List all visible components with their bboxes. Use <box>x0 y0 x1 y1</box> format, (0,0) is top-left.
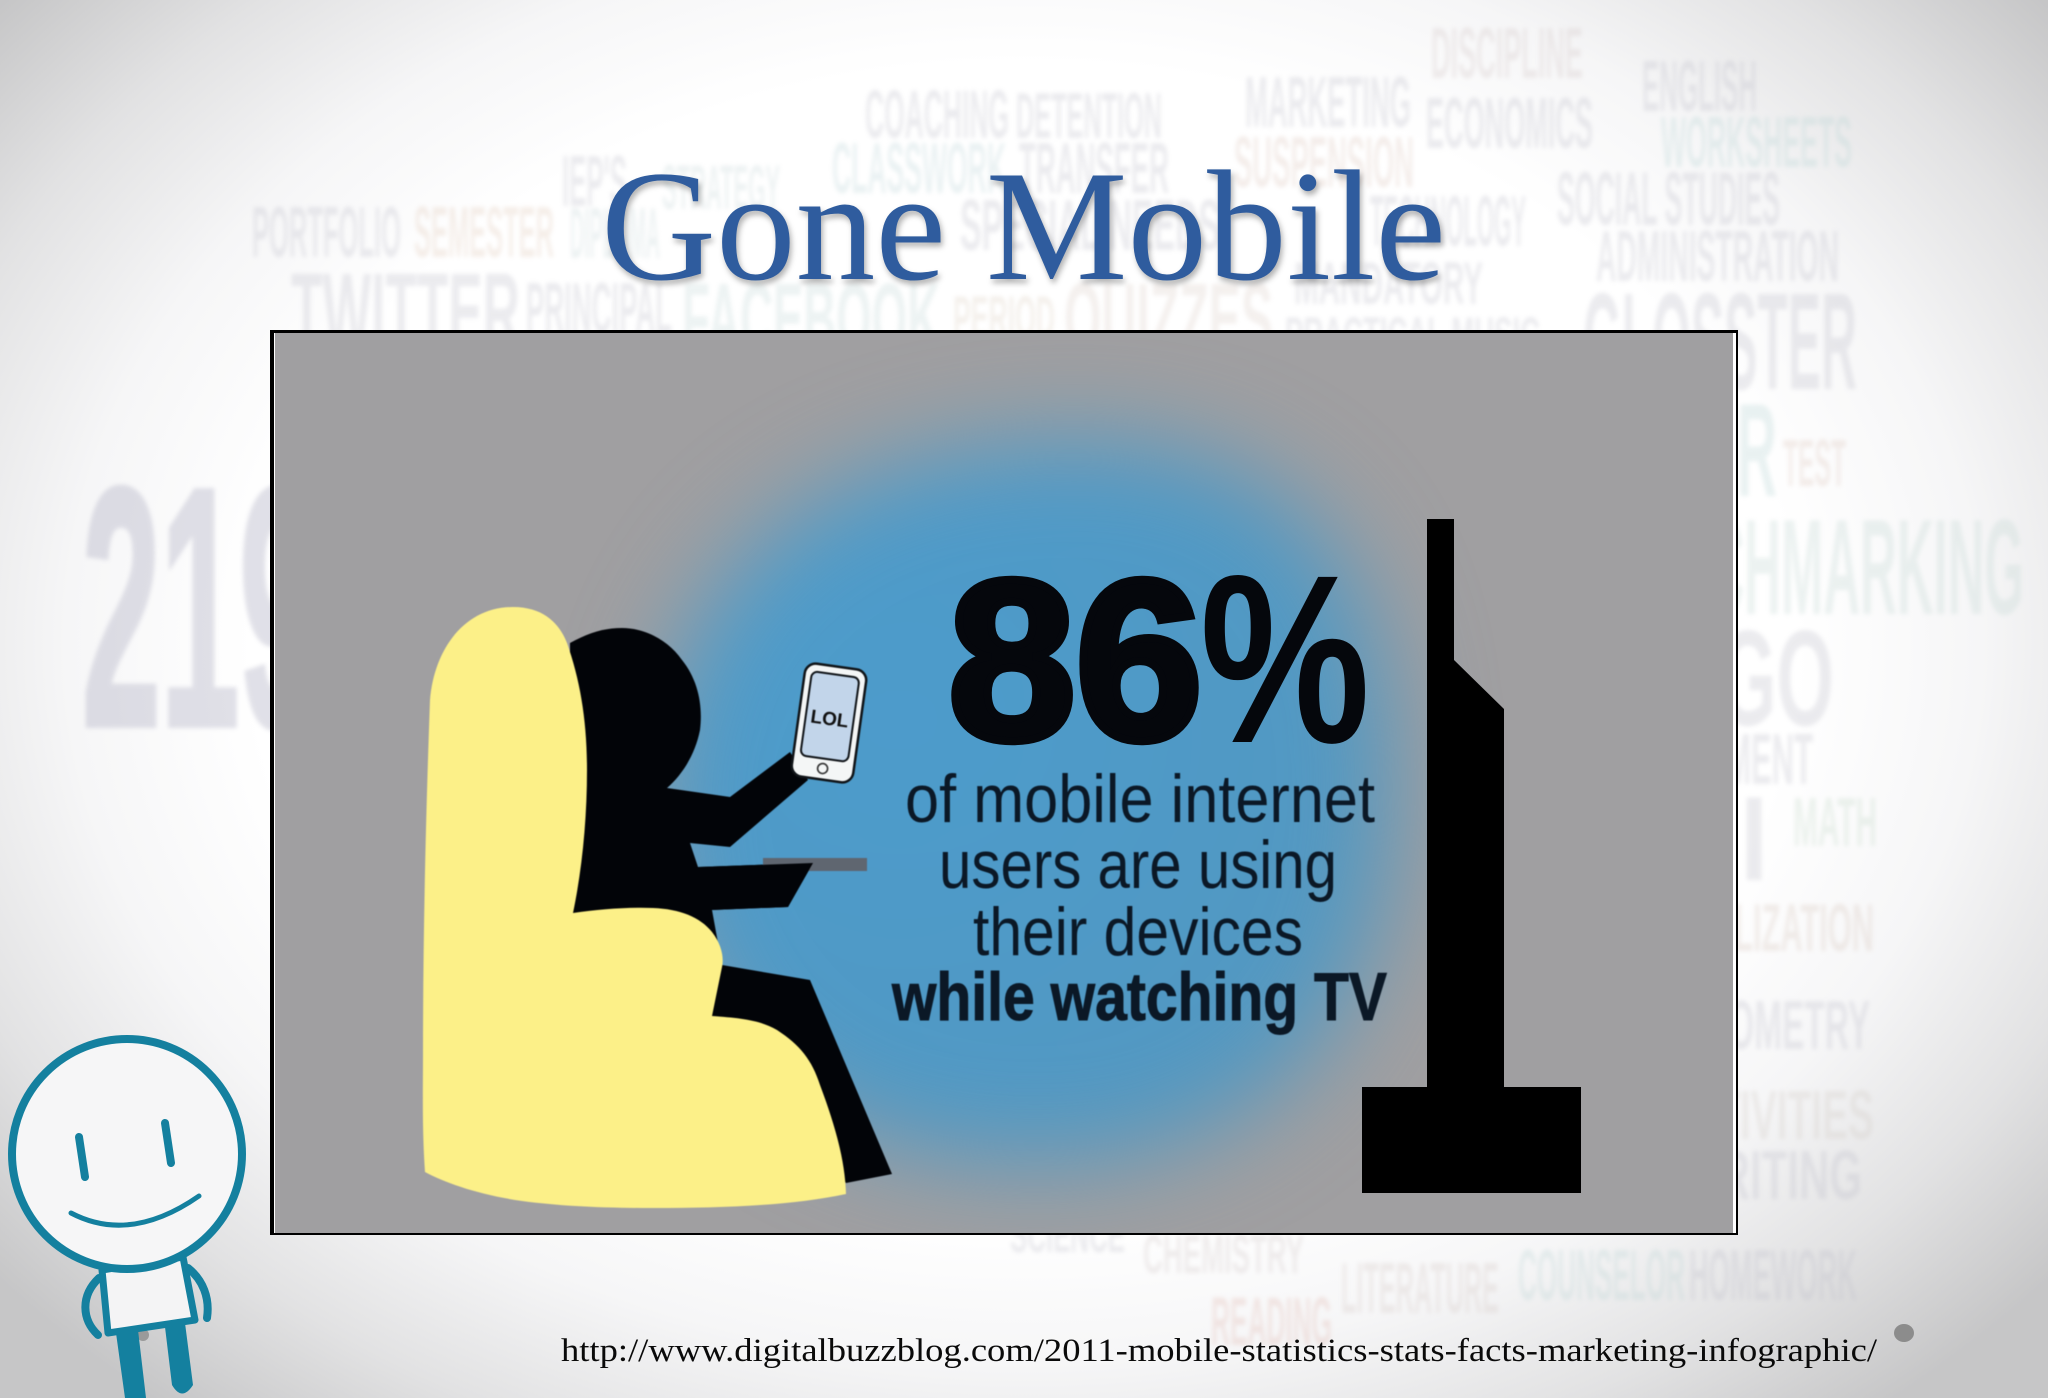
faded word cloud background: FACEBOOK <box>682 263 940 375</box>
statistic caption: users are using <box>939 827 1337 903</box>
faded word cloud background: TEST <box>1783 426 1846 501</box>
statistic 86%: % <box>1200 525 1370 793</box>
infographic image panel <box>270 330 1738 1235</box>
mascot body <box>102 1257 195 1333</box>
faded word cloud background: QUIZZES <box>1064 263 1273 375</box>
faded word cloud background: DISCIPLINE <box>1431 14 1583 94</box>
faded word cloud background: SEMESTER <box>414 193 554 273</box>
faded word cloud background: TWITTER <box>291 251 520 374</box>
icon: smartphone with LOL: LOL <box>809 706 850 733</box>
statistic caption: while watching TV <box>891 959 1387 1035</box>
faded word cloud background: READING <box>1211 1283 1332 1360</box>
faded word cloud background: ENGLISH <box>1642 47 1757 127</box>
statistic caption: their devices <box>973 894 1303 970</box>
icon: smartphone with LOL <box>790 662 868 784</box>
faded word cloud background: ACTIVITIES <box>1660 1076 1874 1154</box>
faded word cloud background: LINGO <box>1600 602 1834 754</box>
faded word cloud background: 219 <box>82 418 318 798</box>
faded word cloud background: DETENTION <box>1016 79 1162 152</box>
mascot gray tick <box>137 1329 149 1341</box>
mascot eyes <box>79 1123 171 1177</box>
faded word cloud background: COACHING <box>865 76 1009 153</box>
icon: yellow armchair <box>423 607 846 1208</box>
icon: person silhouette <box>570 628 892 1183</box>
icon: television side view <box>1362 519 1581 1193</box>
source url: http://www.digitalbuzzblog.com/2011-mobile-statistics-stats-facts-marketing-infographic/ <box>561 1333 1878 1369</box>
faded word cloud background: PORTFOLIO <box>252 193 401 273</box>
statistic 86% <box>948 525 1370 793</box>
slide bullet dot <box>1894 1324 1914 1342</box>
statistic caption <box>891 761 1387 1035</box>
faded word cloud background: TRANSFER <box>1019 129 1169 209</box>
faded word cloud background: MANDATORY <box>1294 250 1483 317</box>
faded word cloud background: CLASSWORK <box>832 129 1006 209</box>
faded word cloud background: PRINCIPAL <box>526 269 672 349</box>
faded word cloud background: PRACTICAL MUSIC <box>1285 307 1540 363</box>
faded word cloud background: WRITING <box>1680 1136 1862 1214</box>
faded word cloud background: IEP'S <box>562 142 627 222</box>
faded word cloud background: COUNSELOR <box>1518 1236 1685 1316</box>
icon: smiley stick figure mascot <box>12 1039 242 1398</box>
blue glow <box>650 439 1395 1165</box>
faded word cloud background: STRATEGY <box>662 153 780 223</box>
faded word cloud background: TECHNOLOGY <box>1370 182 1526 262</box>
mascot smile <box>71 1196 199 1225</box>
faded word cloud background: CHEMISTRY <box>1143 1223 1304 1285</box>
faded word cloud background: I <box>1740 772 1768 906</box>
person watching tv in armchair <box>423 607 892 1208</box>
statistic caption: of mobile internet <box>905 761 1375 837</box>
icon: tray <box>763 858 867 871</box>
faded word cloud background: DIPLOMA <box>570 194 660 274</box>
faded word cloud background: MATH <box>1793 783 1877 861</box>
faded word cloud background: LITERATURE <box>1341 1249 1499 1329</box>
statistic 86%: 8 <box>948 534 1076 788</box>
faded word cloud background: ER <box>1700 377 1777 525</box>
faded word cloud background: ECONOMICS <box>1426 84 1593 164</box>
faded word cloud background: MARKETING <box>1245 63 1411 143</box>
mascot legs <box>116 1323 193 1398</box>
faded word cloud background: SPECIAL NEEDS <box>960 186 1220 266</box>
mascot arms <box>85 1268 208 1335</box>
faded word cloud background: SCIENCE <box>1010 1207 1125 1263</box>
mascot head <box>12 1039 242 1269</box>
statistic 86%: 6 <box>1075 534 1203 788</box>
faded word cloud background: PERIOD <box>953 284 1055 351</box>
title: Gone Mobile <box>601 139 1446 314</box>
faded word cloud background: SUSPENSION <box>1234 123 1414 203</box>
image frame <box>270 330 1738 1235</box>
